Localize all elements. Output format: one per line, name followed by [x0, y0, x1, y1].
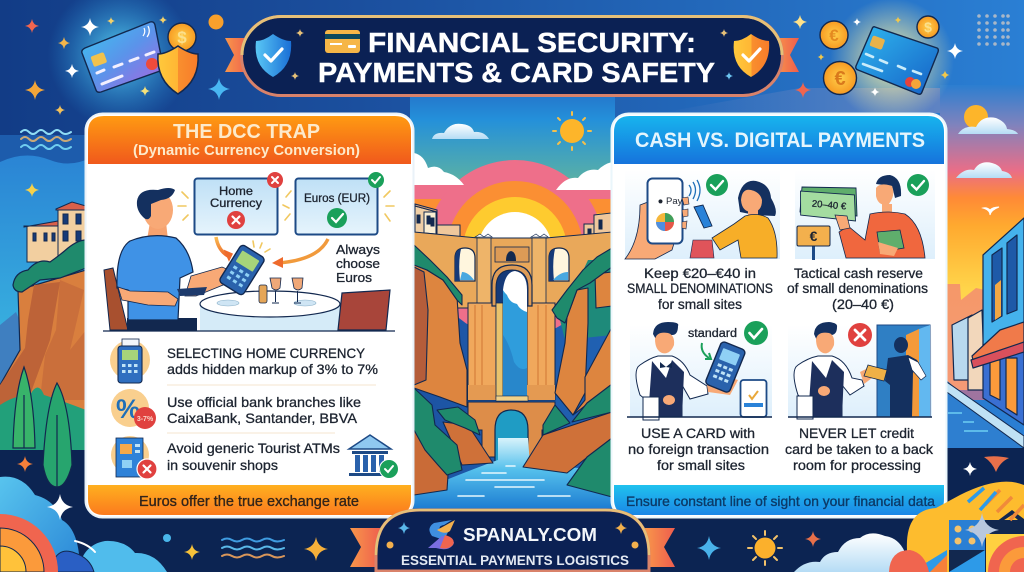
geometric tiles: [889, 488, 1024, 572]
dot grid: [977, 14, 1010, 46]
hand and phone: [625, 178, 700, 259]
label: always choose euros: choose: [336, 256, 380, 271]
tip: official bank branches: 3-7%: [137, 416, 154, 423]
cash bills: [800, 187, 857, 221]
caption: NEVER LET credit: [799, 426, 914, 441]
screen: home currency: Home: [219, 186, 253, 198]
icon: coin: [168, 23, 196, 51]
screen: euros: [296, 172, 384, 234]
clouds: [794, 533, 906, 572]
card: cash reserve: [787, 170, 935, 312]
chair right: [338, 290, 390, 330]
cliffs: [414, 245, 612, 497]
table: [200, 278, 340, 331]
euro sign: [797, 226, 830, 260]
small phone: [740, 380, 766, 417]
person: [117, 188, 234, 331]
icon: orange shield check: [734, 34, 769, 77]
chair left: [104, 268, 128, 330]
tip: selecting home currency: adds hidden markup of 3% to 7%: [167, 361, 378, 377]
icon: credit card: [82, 22, 163, 92]
caption: for small sites: [658, 297, 742, 312]
caption: Keep €20–€40 in: [644, 266, 756, 281]
header: DCC trap: (Dynamic Currency Conversion): [133, 142, 360, 159]
tip: avoid tourist ATMs: Avoid generic Tourist ATMs: [167, 440, 340, 456]
clouds: [0, 477, 167, 572]
icon: title card: [325, 30, 360, 53]
tip: avoid tourist ATMs: in souvenir shops: [167, 457, 278, 473]
woman: [694, 181, 777, 258]
waiter with terminal: [636, 322, 738, 420]
card: use a card: [627, 321, 772, 473]
icon: sun: [553, 112, 591, 150]
title text: FINANCIAL SECURITY:: [368, 27, 696, 58]
icon: small sun: [748, 531, 782, 565]
icon: euro coins: $: [924, 19, 932, 35]
icon: orange shield: [158, 46, 198, 94]
title text: [318, 27, 715, 88]
caption: SMALL DENOMINATIONS: [627, 281, 773, 296]
title banner: [225, 16, 799, 96]
caption: [785, 426, 933, 473]
brand text: SPANALY.COM: [463, 525, 597, 545]
card: digital wallet: [625, 170, 780, 312]
trees: [0, 367, 86, 487]
waves upper: [21, 130, 71, 149]
bottom left decoration: [0, 130, 328, 572]
tagline: ESSENTIAL PAYMENTS LOGISTICS: [401, 553, 629, 568]
shopping bag: [690, 240, 714, 258]
caption: of small denominations: [787, 281, 928, 296]
illustration: diner choosing currency: [103, 172, 395, 331]
POS terminal: [218, 244, 266, 296]
footer: true exchange rate: Euros offer the true exchange rate: [139, 494, 359, 510]
icon: euro coins: €: [829, 26, 839, 45]
footer: line of sight: Ensure constant line of sight on your financial data: [626, 493, 935, 509]
caption: [628, 426, 769, 473]
footer: line of sight: [614, 485, 944, 515]
card: never let credit card out of sight: [785, 322, 933, 473]
caption: (20–40 €): [832, 297, 894, 312]
buildings: [952, 218, 1024, 425]
icon: bank: [349, 435, 398, 478]
cliff: [0, 270, 86, 420]
caption: card be taken to a back: [785, 442, 933, 457]
euro sign: €: [810, 228, 818, 244]
screen: euros: Euros (EUR): [304, 193, 370, 205]
caption: [627, 266, 773, 312]
hand and phone: ● Pay: [658, 196, 683, 207]
tip: official bank branches: %: [116, 394, 140, 424]
cash bills: 20–40 €: [811, 199, 847, 213]
caption: USE A CARD with: [641, 426, 755, 441]
yellow blob: [907, 482, 1024, 572]
caption: room for processing: [793, 458, 921, 473]
footer: true exchange rate: [88, 485, 411, 515]
town buildings: [415, 204, 611, 238]
scene: left hill town: [0, 202, 86, 487]
tip: official bank branches: CaixaBank, Santander, BBVA: [167, 410, 358, 426]
bottom banner: [350, 510, 675, 571]
second waiter: [885, 337, 926, 417]
title text: PAYMENTS & CARD SAFETY: [318, 57, 715, 88]
waves: [222, 538, 284, 558]
header: cash vs digital: [614, 116, 944, 164]
badge: check: [706, 174, 728, 196]
header: DCC trap: THE DCC TRAP: [173, 121, 320, 143]
label: always choose euros: Euros: [336, 270, 373, 285]
rays: [178, 191, 394, 252]
icon: coin: $: [177, 28, 187, 47]
panel: the DCC trap: [86, 114, 414, 518]
header: DCC trap: [88, 116, 411, 164]
logo: [428, 520, 455, 549]
waiter holding card: [794, 322, 887, 419]
caption: no foreign transaction: [628, 442, 769, 457]
back room door: [877, 325, 930, 417]
bottom right decoration: [697, 456, 1024, 572]
label: always choose euros: Always: [336, 242, 381, 257]
river: [414, 438, 612, 508]
top left decoration: card, coin and shield: [25, 0, 230, 127]
bridge: [414, 232, 612, 462]
header: cash vs digital: CASH VS. DIGITAL PAYMENTS: [635, 129, 925, 152]
label: always choose euros: [336, 242, 381, 285]
screen: home currency: Currency: [210, 198, 262, 210]
caption: [787, 266, 928, 312]
tip: official bank branches: Use official bank branches like: [167, 394, 361, 410]
screen: home currency: [194, 172, 283, 234]
label: standard: standard: [688, 328, 737, 340]
arrows to terminal: [216, 237, 328, 268]
rainbow: [0, 514, 58, 572]
top right decoration: card and euro coins: [793, 0, 1010, 122]
street: [944, 378, 1024, 448]
badge: check: [907, 174, 929, 196]
icon: euro coins: €: [834, 68, 846, 90]
panel: cash vs digital payments: [612, 114, 946, 518]
badge: cross: [848, 323, 872, 347]
man with cash: [835, 175, 925, 258]
tip: avoid tourist ATMs: [111, 436, 340, 479]
sunset rainbow: [410, 160, 615, 338]
badge: check: [744, 321, 768, 345]
tip: selecting home currency: SELECTING HOME CURRENCY: [167, 345, 366, 361]
caption: for small sites: [657, 458, 745, 473]
icon: blue shield check: [256, 34, 291, 77]
clouds: [414, 124, 612, 190]
scene: right street: [944, 105, 1024, 448]
icon: blue credit card: [856, 27, 938, 94]
tip: official bank branches: [111, 389, 361, 429]
caption: Tactical cash reserve: [794, 266, 923, 281]
arrow: green: [702, 343, 711, 359]
icon: euro coins: [820, 16, 939, 94]
buildings: [24, 202, 86, 262]
clouds and sun: [956, 105, 1018, 215]
scene: Ronda bridge and sunset: [410, 112, 615, 508]
POS terminal: [705, 341, 746, 393]
tip: selecting home currency: [110, 339, 378, 383]
